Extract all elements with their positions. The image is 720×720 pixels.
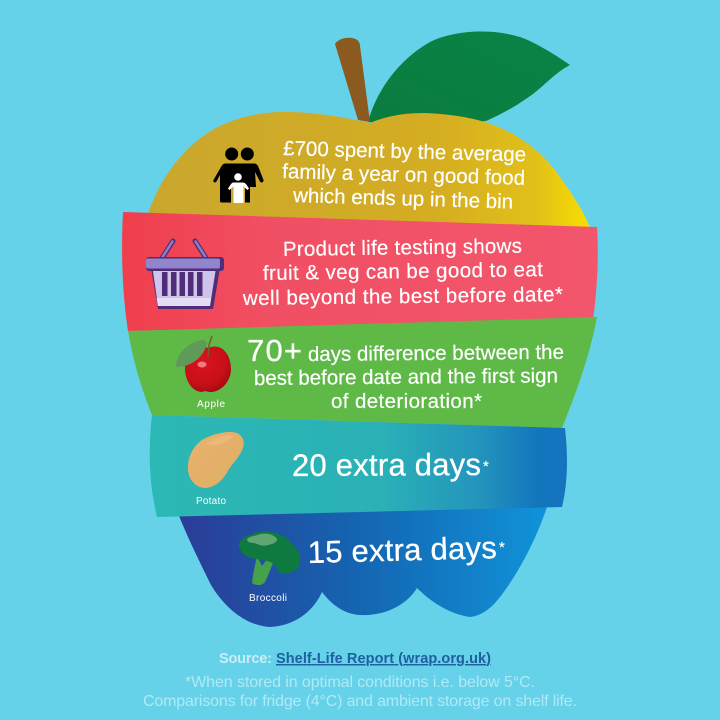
text: product life testing: fruit & veg can be good to eat — [263, 258, 543, 285]
band: teal to blue — [150, 415, 567, 517]
text: 20 extra days: * — [483, 458, 489, 475]
text: 15 extra days: 15 extra days — [307, 530, 497, 570]
text: 20 extra days: 20 extra days — [292, 447, 481, 483]
text: product life testing — [242, 235, 563, 310]
text: product life testing: Product life testing shows — [283, 235, 522, 261]
text: product life testing: well beyond the best before date* — [242, 283, 563, 310]
source line: Shelf-Life Report (wrap.org.uk) — [276, 651, 491, 667]
label: broccoli: Broccoli — [249, 593, 287, 604]
text: 70+ days: of deterioration* — [331, 390, 482, 413]
text: 70+ days — [247, 333, 564, 413]
footnote — [143, 674, 577, 710]
text: £700 spent — [282, 137, 526, 214]
label: apple: Apple — [197, 399, 225, 410]
footnote: *When stored in optimal conditions i.e. below 5°C. — [185, 674, 535, 691]
apple leaf — [368, 32, 570, 126]
text: 70+ days: best before date and the first sign — [254, 364, 558, 390]
band: red — [122, 212, 598, 331]
text: 15 extra days: * — [499, 539, 505, 556]
apple icon — [176, 336, 231, 392]
basket icon — [146, 241, 224, 309]
text: £700 spent: family a year on good food — [282, 160, 525, 190]
text: £700 spent: £700 spent by the average — [283, 137, 526, 166]
band: yellow apple top — [148, 112, 590, 240]
band: green — [128, 317, 597, 428]
source line: Source: — [219, 651, 272, 667]
text: £700 spent: which ends up in the bin — [292, 184, 513, 214]
broccoli icon — [239, 531, 300, 585]
text: 70+ days: 70+ — [247, 333, 302, 368]
label: potato: Potato — [196, 496, 226, 507]
family icon — [213, 148, 264, 203]
footnote: Comparisons for fridge (4°C) and ambient storage on shelf life. — [143, 693, 577, 710]
potato icon — [188, 432, 244, 488]
apple stem — [335, 38, 370, 122]
band: bottom blue — [179, 507, 547, 627]
text: 70+ days: days difference between the — [308, 341, 564, 366]
